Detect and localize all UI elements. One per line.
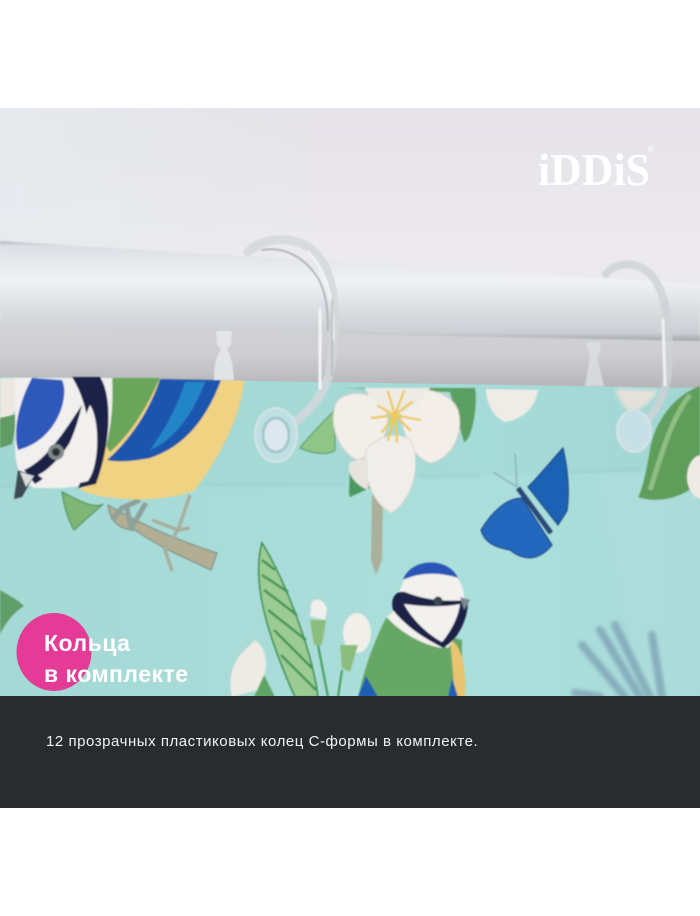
caption text: 12 прозрачных пластиковых колец С-формы в комплекте. xyxy=(46,733,478,750)
grey band under rod xyxy=(0,320,700,392)
logo: IDDIS: ® xyxy=(648,145,654,154)
leaf lower left xyxy=(0,590,24,634)
heading: rings included: в комплекте xyxy=(44,661,189,687)
leaf next to grommet xyxy=(300,410,335,454)
bird 2: blue tit lower xyxy=(358,562,470,697)
logo: IDDIS: iDDiS xyxy=(538,144,650,195)
leaf left edge xyxy=(0,414,18,448)
heading: rings included: Кольца xyxy=(44,630,130,656)
rod xyxy=(0,241,700,341)
small buds and stems xyxy=(230,599,371,697)
white blossom xyxy=(333,388,476,575)
ring 1: grommet xyxy=(255,408,297,462)
dark caption band xyxy=(0,696,700,808)
small clip behind ring 1 xyxy=(214,331,234,380)
curtain fabric xyxy=(0,377,700,697)
ring 1: C-ring xyxy=(248,240,334,432)
bird 1: blue tit xyxy=(14,377,244,571)
ring 2: grommet xyxy=(617,410,651,452)
flower top-left corner xyxy=(0,378,32,424)
small white flowers top xyxy=(486,389,538,422)
heading: rings included xyxy=(44,630,189,687)
wall background xyxy=(0,108,700,398)
small clip behind ring 2 xyxy=(585,342,604,386)
ring 2: C-ring xyxy=(606,264,669,430)
tall striped leaf xyxy=(259,543,318,697)
pink circle badge xyxy=(16,613,92,691)
blurred feather at right xyxy=(575,625,662,697)
butterfly xyxy=(481,448,568,558)
large leaf right xyxy=(638,386,700,500)
